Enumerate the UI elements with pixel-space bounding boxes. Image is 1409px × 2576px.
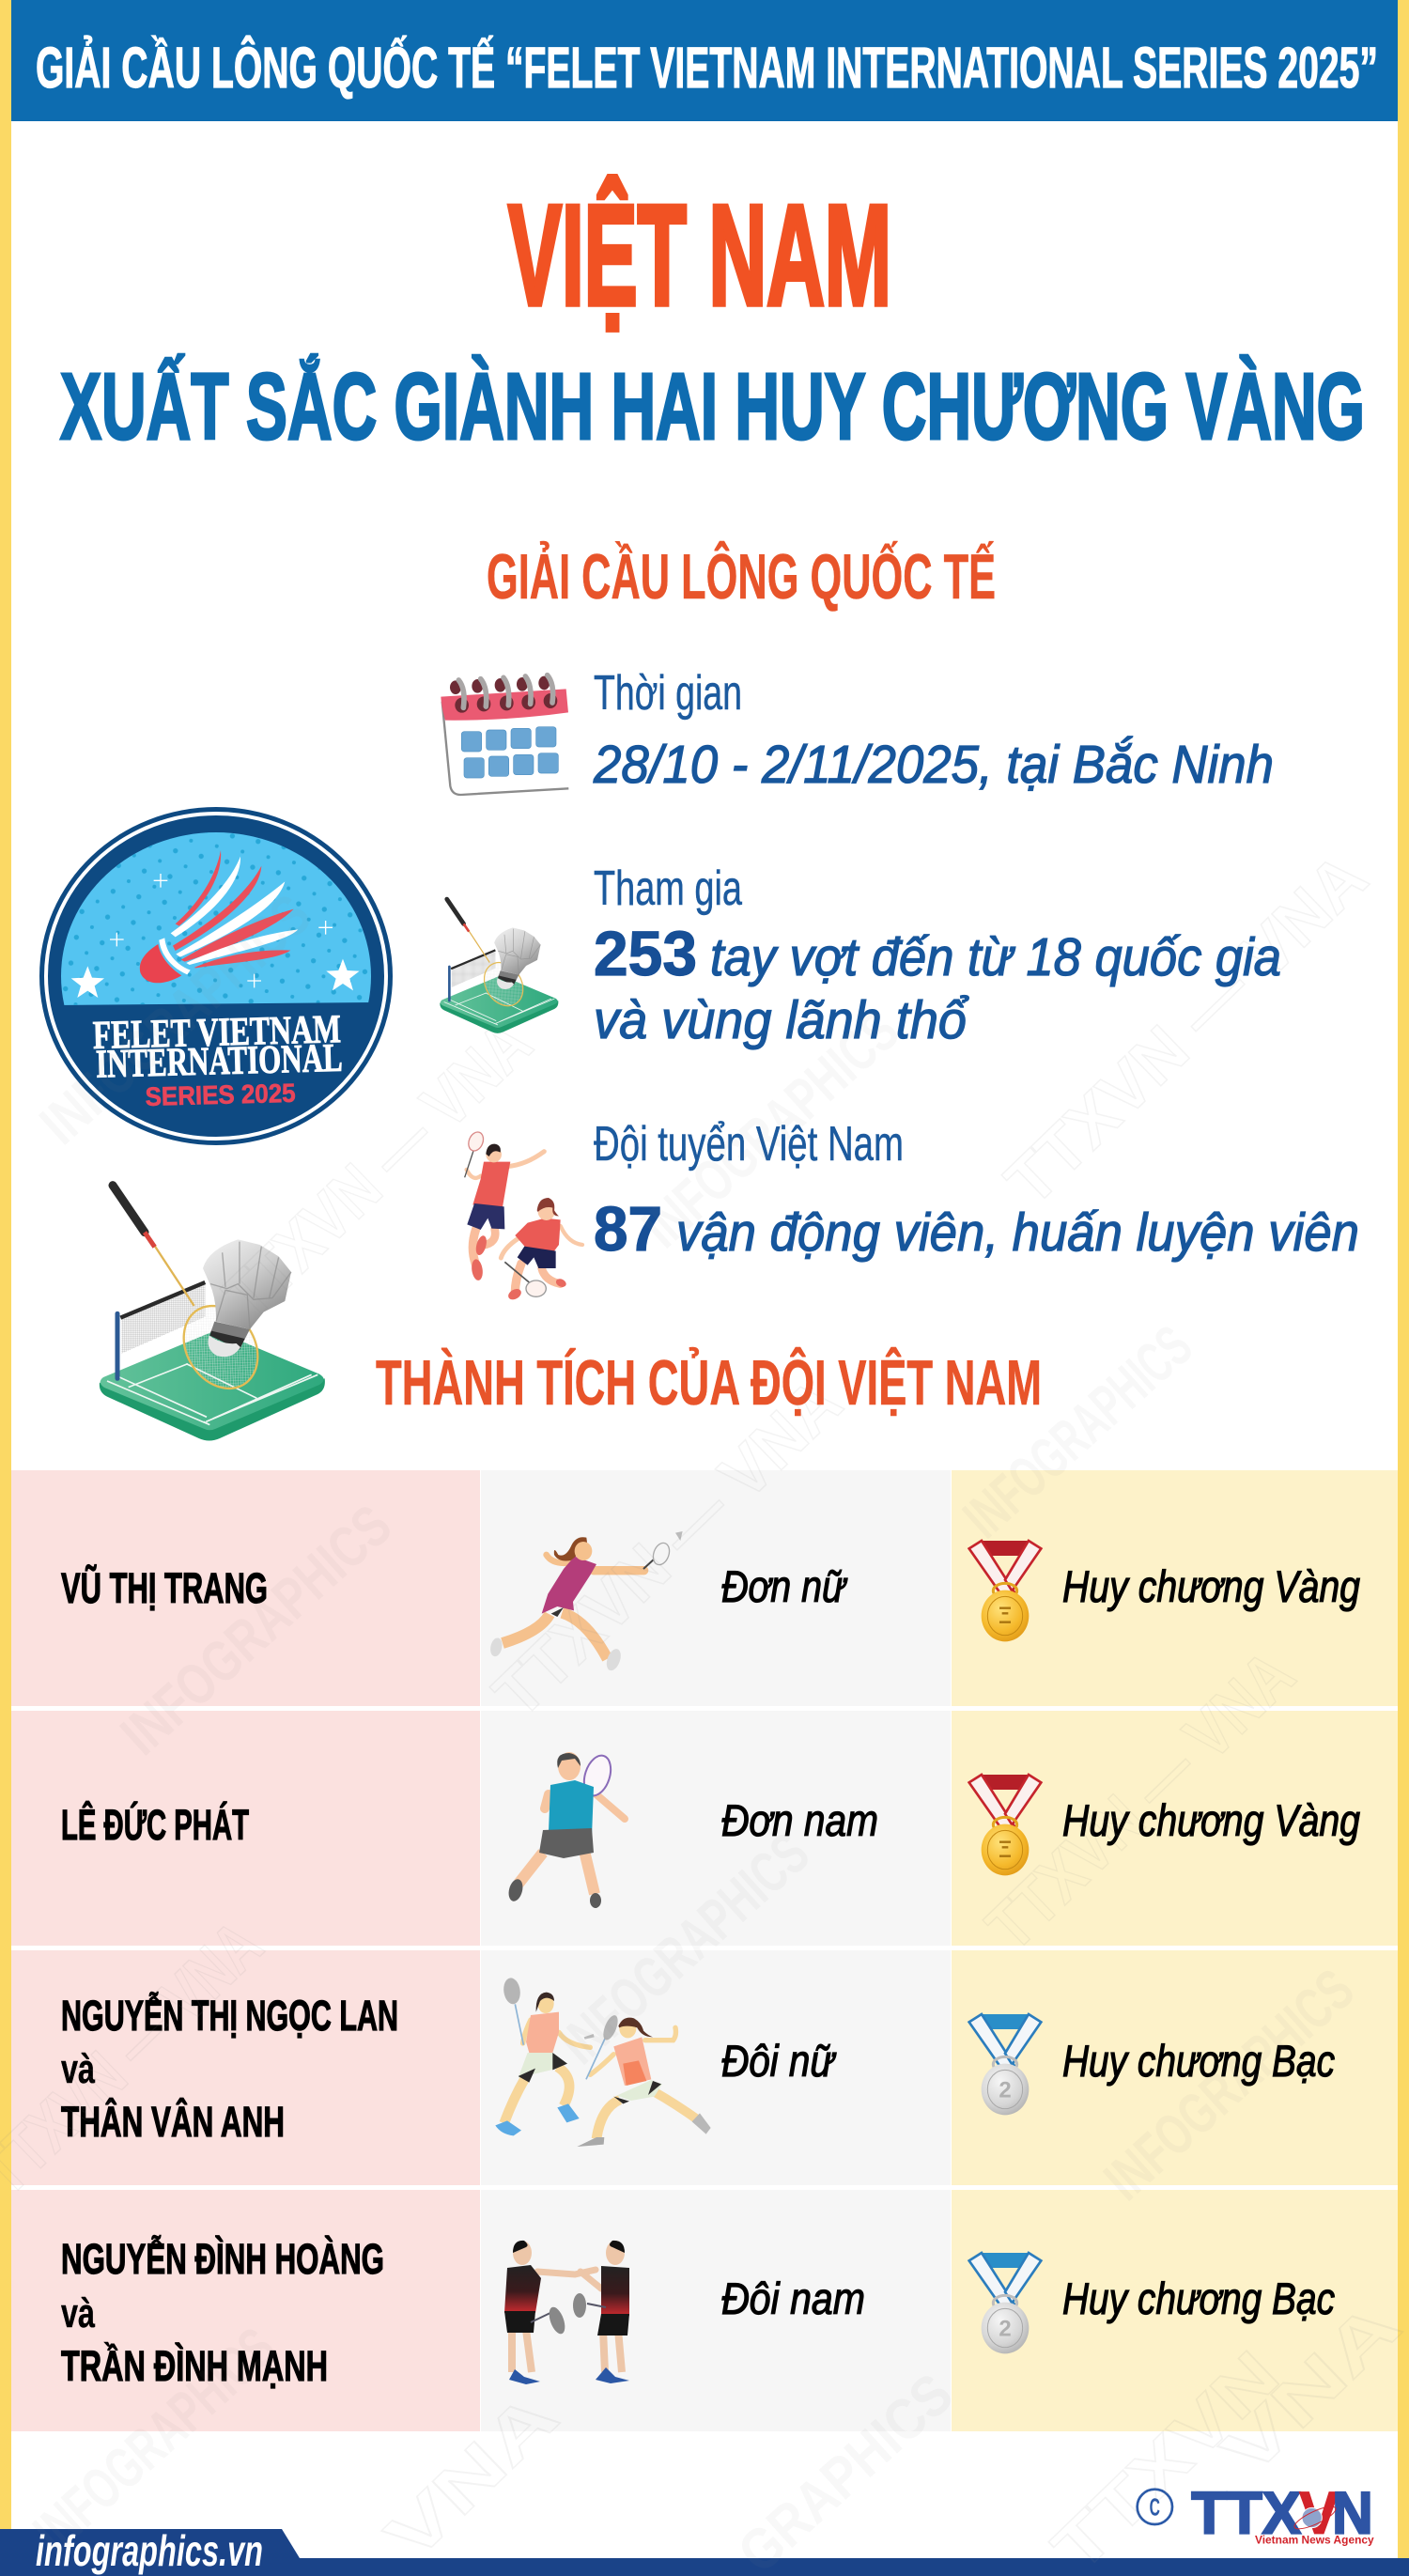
info: participants	[594, 861, 1281, 1050]
row 4: Nguyễn Đình Hoàng và Trần Đình Mạnh: NGUYỄN ĐÌNH HOÀNG	[61, 2235, 384, 2283]
info: participants: và vùng lãnh thổ	[594, 990, 969, 1050]
section heading: achievements: THÀNH TÍCH CỦA ĐỘI VIỆT NAM	[376, 1346, 1042, 1419]
watermarks: INFOGRAPHICS	[952, 1313, 1204, 1550]
logo badge: Felet Vietnam International Series 2025: FELET VIETNAM	[92, 1007, 341, 1058]
info: time: Thời gian	[594, 666, 742, 721]
watermarks: INFOGRAPHICS	[548, 1821, 822, 2076]
title: Việt Nam: VIỆT NAM	[508, 176, 891, 335]
header banner	[11, 0, 1398, 121]
watermarks: INFOGRAPHICS	[109, 1493, 404, 1767]
row 4: Nguyễn Đình Hoàng và Trần Đình Mạnh: Huy chương Bạc	[1062, 2273, 1335, 2323]
row 3: Nguyễn Thị Ngọc Lan và Thân Vân Anh: THÂN VÂN ANH	[61, 2098, 285, 2146]
watermarks: TTXVN — VNA	[973, 1637, 1308, 1965]
row 2: Lê Đức Phát: Huy chương Vàng	[1062, 1795, 1360, 1845]
row 1: Vũ Thị Trang: VŨ THỊ TRANG	[61, 1564, 268, 1612]
logo badge: Felet Vietnam International Series 2025	[39, 807, 393, 1145]
row 2: Lê Đức Phát	[11, 1711, 1398, 1946]
watermarks: INFOGRAPHICS	[28, 882, 323, 1156]
info: Vietnam team: 87	[594, 1194, 662, 1265]
logo badge: Felet Vietnam International Series 2025: SERIES 2025	[145, 1079, 296, 1111]
logo badge: Felet Vietnam International Series 2025: INTERNATIONAL	[95, 1036, 343, 1087]
watermarks: VNA	[372, 2378, 572, 2576]
row 4: Nguyễn Đình Hoàng và Trần Đình Mạnh: TRẦN ĐÌNH MẠNH	[61, 2342, 328, 2390]
info: Vietnam team	[594, 1117, 1359, 1265]
watermarks: VNA	[1208, 2287, 1409, 2491]
row 3: Nguyễn Thị Ngọc Lan và Thân Vân Anh: và	[61, 2046, 95, 2092]
row 2: Lê Đức Phát: Đơn nam	[721, 1795, 878, 1845]
info: time: 28/10 - 2/11/2025, tại Bắc Ninh	[593, 735, 1274, 795]
row 4: Nguyễn Đình Hoàng và Trần Đình Mạnh: Đôi nam	[721, 2273, 865, 2323]
TTXVN copyright logo: N	[1332, 2481, 1373, 2547]
row 3: Nguyễn Thị Ngọc Lan và Thân Vân Anh: NGUYỄN THỊ NGỌC LAN	[61, 1992, 398, 2040]
icon: two players in red	[465, 1130, 582, 1302]
row 3: Nguyễn Thị Ngọc Lan và Thân Vân Anh	[11, 1950, 1398, 2185]
TTXVN copyright logo: C	[1150, 2492, 1160, 2521]
info: participants: Tham gia	[594, 861, 742, 916]
icon: small shuttlecock and court	[440, 899, 558, 1033]
watermarks: TTXVN — VNA	[480, 1365, 856, 1732]
info: participants: tay vợt đến từ 18 quốc gia	[710, 927, 1281, 987]
row 4: Nguyễn Đình Hoàng và Trần Đình Mạnh: và	[61, 2290, 95, 2336]
info: Vietnam team: vận động viên, huấn luyện viên	[676, 1203, 1359, 1263]
row 3: Nguyễn Thị Ngọc Lan và Thân Vân Anh: Đôi nữ	[721, 2036, 837, 2086]
row 1: Vũ Thị Trang	[11, 1470, 1398, 1706]
TTXVN copyright logo: TTX	[1191, 2481, 1301, 2547]
row 3: Nguyễn Thị Ngọc Lan và Thân Vân Anh: Huy chương Bạc	[1062, 2036, 1335, 2086]
section heading: tournament: GIẢI CẦU LÔNG QUỐC TẾ	[487, 540, 996, 613]
info: Vietnam team: Đội tuyển Việt Nam	[594, 1117, 904, 1172]
results table	[11, 1470, 1398, 2431]
footer bar with website tab	[0, 2526, 1409, 2576]
icon: large shuttlecock and court	[100, 1186, 325, 1440]
watermarks	[0, 840, 1409, 2576]
row 4: Nguyễn Đình Hoàng và Trần Đình Mạnh	[11, 2190, 1398, 2431]
TTXVN copyright logo: Vietnam News Agency	[1255, 2533, 1374, 2546]
row 2: Lê Đức Phát: LÊ ĐỨC PHÁT	[61, 1801, 249, 1849]
info: participants: 253	[594, 919, 697, 989]
watermarks: INFOGRAPHICS	[630, 999, 911, 1260]
TTXVN copyright logo: V	[1299, 2481, 1339, 2547]
footer bar with website tab: infographics.vn	[36, 2526, 263, 2575]
watermarks: TTXVN — VNA	[992, 840, 1382, 1220]
watermarks: INFOGRAPHICS	[22, 2316, 288, 2565]
info: time	[593, 666, 1274, 795]
icon: calendar	[441, 675, 568, 795]
TTXVN copyright logo	[1138, 2481, 1374, 2547]
row 1: Vũ Thị Trang: Huy chương Vàng	[1062, 1561, 1360, 1611]
watermarks: TTXVN — VNA	[210, 1005, 546, 1334]
row 1: Vũ Thị Trang: Đơn nữ	[721, 1561, 848, 1611]
